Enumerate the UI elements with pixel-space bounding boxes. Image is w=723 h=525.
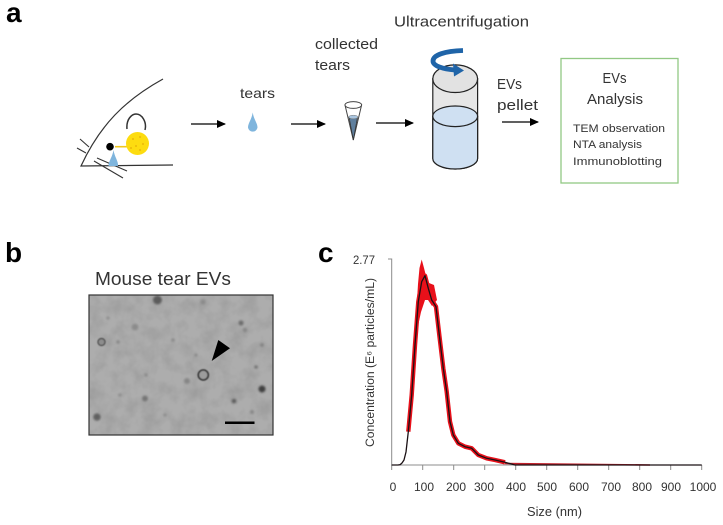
x-axis tick labels (390, 480, 717, 494)
label: ultracentrifugation: Ultracentrifugation (394, 14, 529, 30)
text: analysis methods: NTA analysis (573, 139, 642, 151)
x-axis tick labels: 500 (537, 480, 557, 494)
x-axis tick labels: 300 (474, 480, 494, 494)
red error band (408, 260, 650, 465)
x-axis tick labels: 200 (446, 480, 466, 494)
arrow: mouse to tears (191, 123, 225, 125)
arrow: tube to centrifuge (376, 122, 413, 124)
y-axis value 2.77: 2.77 (353, 255, 375, 267)
text: analysis methods: Immunoblotting (573, 156, 662, 168)
micrograph (89, 295, 273, 435)
x-axis tick labels: 400 (506, 480, 526, 494)
heading: Mouse tear EVs: Mouse tear EVs (95, 268, 231, 289)
x-axis tick labels: 100 (414, 480, 434, 494)
scale bar (225, 422, 254, 424)
label: tears: tears (240, 85, 275, 101)
label: EVs pellet: EVs (497, 77, 522, 93)
x-axis tick labels: 1000 (690, 480, 717, 494)
mean size curve (392, 276, 702, 465)
panel a: workflow (6, 0, 678, 183)
label b: b (5, 237, 22, 268)
x-axis tick labels: 900 (661, 480, 681, 494)
x-axis title: Size (nm) (527, 505, 582, 519)
arrow: pellet to analysis (502, 121, 538, 123)
panel c: size distribution chart (318, 237, 717, 519)
y-axis title: Concentration (E⁶ particles/mL) (365, 278, 377, 447)
heading: EVs Analysis: EVs (602, 71, 626, 87)
panel: EVs analysis box (561, 58, 678, 183)
heading: EVs Analysis: Analysis (587, 92, 643, 108)
label: EVs pellet: pellet (497, 98, 538, 114)
x-axis tick labels: 800 (632, 480, 652, 494)
x-axis tick labels: 0 (390, 480, 397, 494)
icon: centrifuge cylinder (433, 65, 478, 169)
icon: arrowhead pointer (212, 340, 230, 361)
label c: c (318, 237, 334, 268)
axes (388, 259, 702, 470)
text: analysis methods: TEM observation (573, 123, 665, 135)
x-axis tick labels: 600 (569, 480, 589, 494)
x-axis tick labels: 700 (601, 480, 621, 494)
icon: tear drop (248, 112, 258, 132)
arrow: tears to tube (291, 123, 325, 125)
label: collected tears: tears (315, 58, 350, 74)
panel b: TEM image (5, 237, 273, 435)
icon: collection tube (345, 102, 362, 140)
icon: mouse head with lacrimal gland (77, 79, 173, 178)
icon: rotation arrow (433, 50, 464, 76)
label: collected tears: collected (315, 37, 378, 53)
